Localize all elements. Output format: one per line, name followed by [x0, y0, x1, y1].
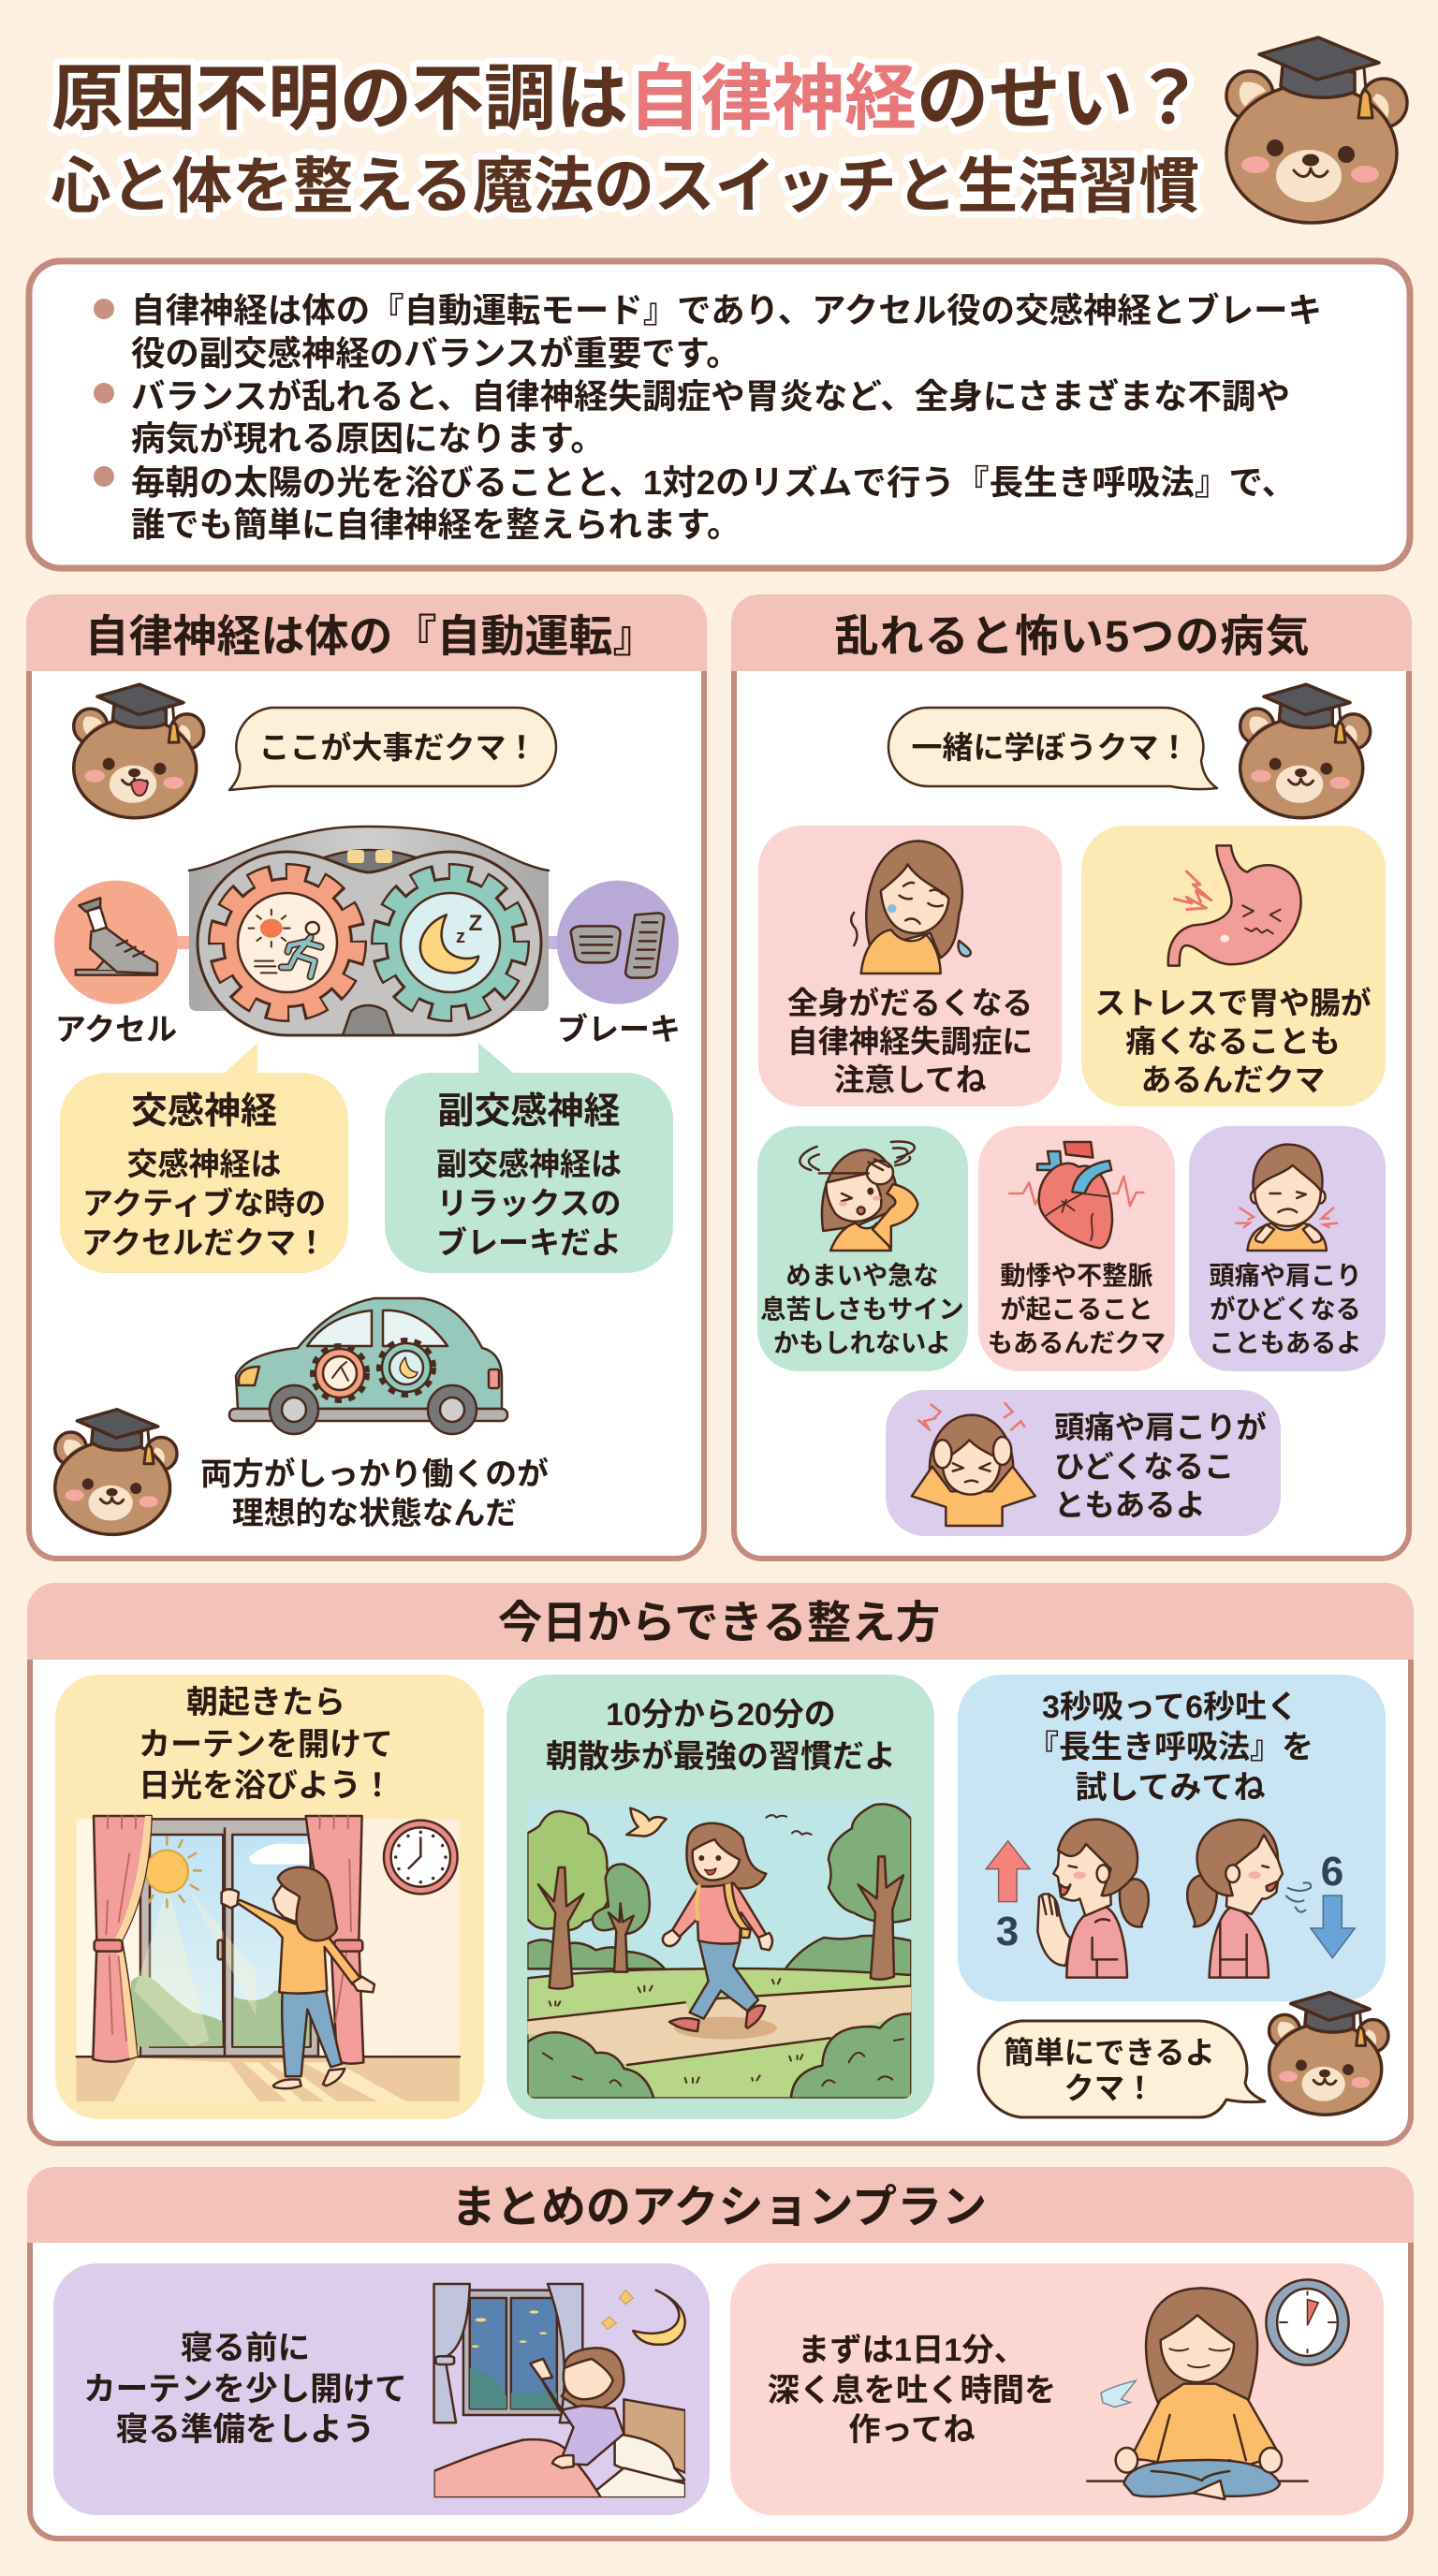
- speech bubble: ここが大事だクマ！: [258, 730, 537, 765]
- illustration: night window and bed: [434, 2284, 685, 2497]
- card: morning walk: 10分から20分の: [606, 1697, 836, 1733]
- card: whole-body fatigue: 自律神経失調症に: [787, 1024, 1033, 1059]
- card: morning walk: 朝散歩が最強の習慣だよ: [546, 1738, 896, 1775]
- icon: accelerator pedal: [54, 881, 204, 1046]
- illustration: walk in the park: [527, 1797, 911, 2099]
- panel heading: 乱れると怖い5つの病気: [835, 611, 1309, 661]
- card: long-life breathing: 『長生き呼吸法』を: [1027, 1730, 1313, 1765]
- title: 心と体を整える魔法のスイッチと生活習慣: [51, 152, 1199, 220]
- title: [51, 59, 1205, 220]
- card: morning walk: [506, 1675, 934, 2119]
- card: one minute a day: 深く息を吐く時間を: [768, 2373, 1056, 2408]
- icon: bear: [1269, 1993, 1388, 2115]
- card: before bed: [53, 2263, 710, 2515]
- callout: parasympathetic: ブレーキだよ: [436, 1225, 622, 1260]
- right profile: [1187, 1820, 1283, 1978]
- card: palpitations: が起こること: [1000, 1295, 1153, 1324]
- card: headache: 頭痛や肩こりが: [1054, 1410, 1267, 1444]
- speech bubble: 簡単にできるよ: [1004, 2036, 1215, 2070]
- card: palpitations: もあるんだクマ: [988, 1328, 1166, 1357]
- girl walking: [663, 1823, 772, 2031]
- notch: [343, 1005, 394, 1035]
- card: whole-body fatigue: 注意してね: [833, 1062, 987, 1097]
- callout: parasympathetic: [385, 1043, 673, 1273]
- card: dizziness: かもしれないよ: [773, 1328, 951, 1357]
- illustration: heart: [1008, 1142, 1144, 1248]
- panel: five illnesses: [731, 594, 1412, 1559]
- card: headache: ともあるよ: [1054, 1488, 1206, 1522]
- panel heading: まとめのアクションプラン: [451, 2183, 987, 2232]
- bullet list: [94, 291, 1322, 544]
- card: morning sunlight: [55, 1675, 484, 2119]
- card: long-life breathing: 6: [1321, 1849, 1343, 1895]
- icon: accelerator pedal: アクセル: [55, 1012, 177, 1046]
- panel: summary action plan: [27, 2167, 1414, 2539]
- caption: 理想的な状態なんだ: [232, 1496, 517, 1531]
- panel heading: 自律神経は体の『自動運転』: [84, 611, 657, 661]
- panel heading: [26, 594, 707, 671]
- card: whole-body fatigue: [758, 826, 1062, 1106]
- panel heading: 今日からできる整え方: [498, 1599, 940, 1648]
- girl: [222, 1867, 374, 2088]
- card: stomach pain: あるんだクマ: [1141, 1062, 1325, 1097]
- callout: sympathetic: [60, 1043, 348, 1273]
- housing: [198, 852, 541, 1035]
- illustration: boy with stiff shoulders: [1235, 1145, 1338, 1251]
- card: one minute a day: まずは1日1分、: [798, 2333, 1026, 2368]
- panel heading: [27, 1583, 1414, 1660]
- card: one minute a day: 作ってね: [848, 2412, 976, 2448]
- icon: bear happy: [74, 684, 204, 818]
- panel heading: [27, 2167, 1414, 2243]
- icon: bear: [1240, 684, 1371, 818]
- callout: parasympathetic: 副交感神経は: [436, 1147, 622, 1181]
- gear: sympathetic: [219, 874, 356, 1011]
- card: shoulder stiffness: 頭痛や肩こり: [1209, 1261, 1362, 1290]
- illustration: dizzy woman: [800, 1141, 917, 1251]
- card: stomach pain: [1081, 826, 1386, 1106]
- gear: parasympathetic: z: [456, 927, 465, 947]
- callout: sympathetic: 交感神経は: [127, 1147, 281, 1181]
- callout: sympathetic: アクティブな時の: [82, 1186, 326, 1221]
- card: morning sunlight: 日光を浴びよう！: [139, 1768, 393, 1804]
- card: headache: ひどくなるこ: [1054, 1450, 1234, 1484]
- illustration: stomach: [1168, 845, 1301, 966]
- card: one minute a day: [730, 2263, 1384, 2515]
- speech bubble: クマ！: [1064, 2071, 1155, 2105]
- caption: 両方がしっかり働くのが: [200, 1456, 549, 1492]
- bullet list: 病気が現れる原因になります。: [131, 419, 605, 458]
- card: long-life breathing: [958, 1675, 1386, 2001]
- panel: summary: [29, 261, 1410, 568]
- illustration: inhale and exhale: [986, 1820, 1355, 1978]
- card: palpitations: [978, 1126, 1175, 1371]
- card: palpitations: 動悸や不整脈: [1000, 1261, 1153, 1290]
- caption: [200, 1456, 549, 1531]
- card: stomach pain: ストレスで胃や腸が: [1094, 986, 1372, 1020]
- illustration: meditating woman with clock: [1087, 2279, 1349, 2499]
- card: dizziness: [757, 1126, 968, 1371]
- card: morning sunlight: カーテンを開けて: [139, 1727, 393, 1763]
- card: dizziness: めまいや急な: [785, 1261, 939, 1290]
- speech bubble: [978, 2021, 1265, 2117]
- callout: sympathetic: アクセルだクマ！: [81, 1225, 327, 1260]
- card: long-life breathing: 3: [996, 1909, 1019, 1954]
- panel heading: [731, 594, 1412, 671]
- card: morning sunlight: 朝起きたら: [186, 1685, 345, 1720]
- callout: sympathetic: 交感神経: [131, 1091, 277, 1132]
- card: headache: [886, 1390, 1281, 1536]
- gear: parasympathetic: Z: [469, 911, 482, 936]
- card: before bed: 寝る準備をしよう: [116, 2412, 374, 2448]
- icon: bear smiling: [55, 1410, 177, 1534]
- speech bubble: [888, 708, 1217, 789]
- card: dizziness: 息苦しさもサイン: [760, 1295, 964, 1324]
- card: stomach pain: 痛くなることも: [1125, 1024, 1341, 1059]
- title: 原因不明の不調は自律神経のせい？: [51, 59, 1205, 139]
- speech bubble: 一緒に学ぼうクマ！: [912, 730, 1189, 765]
- bullet list: 誰でも簡単に自律神経を整えられます。: [131, 505, 741, 544]
- bullet list: バランスが乱れると、自律神経失調症や胃炎など、全身にさまざまな不調や: [131, 377, 1290, 416]
- panel: autonomic nerves as autopilot: [26, 594, 707, 1559]
- icon: car with two gears: [229, 1298, 507, 1434]
- card: whole-body fatigue: 全身がだるくなる: [787, 986, 1033, 1020]
- card: before bed: カーテンを少し開けて: [83, 2372, 407, 2408]
- illustration: sad woman: [851, 841, 971, 973]
- callout: parasympathetic: 副交感神経: [437, 1091, 621, 1132]
- left profile: [1037, 1820, 1149, 1978]
- card: shoulder stiffness: こともあるよ: [1209, 1328, 1362, 1357]
- card: before bed: 寝る前に: [181, 2331, 310, 2366]
- card: long-life breathing: 3秒吸って6秒吐く: [1042, 1690, 1299, 1725]
- bullet list: 毎朝の太陽の光を浴びることと、1対2のリズムで行う『長生き呼吸法』で、: [131, 463, 1296, 502]
- speech bubble: [229, 708, 556, 790]
- panel: how to regulate from today: [27, 1583, 1414, 2144]
- icon: brake pedals: [534, 881, 681, 1046]
- gear: parasympathetic: [382, 874, 519, 1011]
- bullet list: 役の副交感神経のバランスが重要です。: [131, 334, 741, 373]
- diagram: dashboard with gears: [189, 827, 549, 1035]
- callout: parasympathetic: リラックスの: [436, 1186, 622, 1221]
- illustration: opening curtains: [77, 1816, 460, 2101]
- icon: brake pedals: ブレーキ: [557, 1012, 681, 1046]
- icon: graduate bear mascot: [1226, 37, 1407, 223]
- card: long-life breathing: 試してみてね: [1076, 1770, 1265, 1806]
- card: shoulder stiffness: がひどくなる: [1210, 1295, 1361, 1324]
- bullet list: 自律神経は体の『自動運転モード』であり、アクセル役の交感神経とブレーキ: [131, 291, 1322, 329]
- card: shoulder stiffness: [1189, 1126, 1386, 1371]
- illustration: woman holding head: [912, 1402, 1035, 1526]
